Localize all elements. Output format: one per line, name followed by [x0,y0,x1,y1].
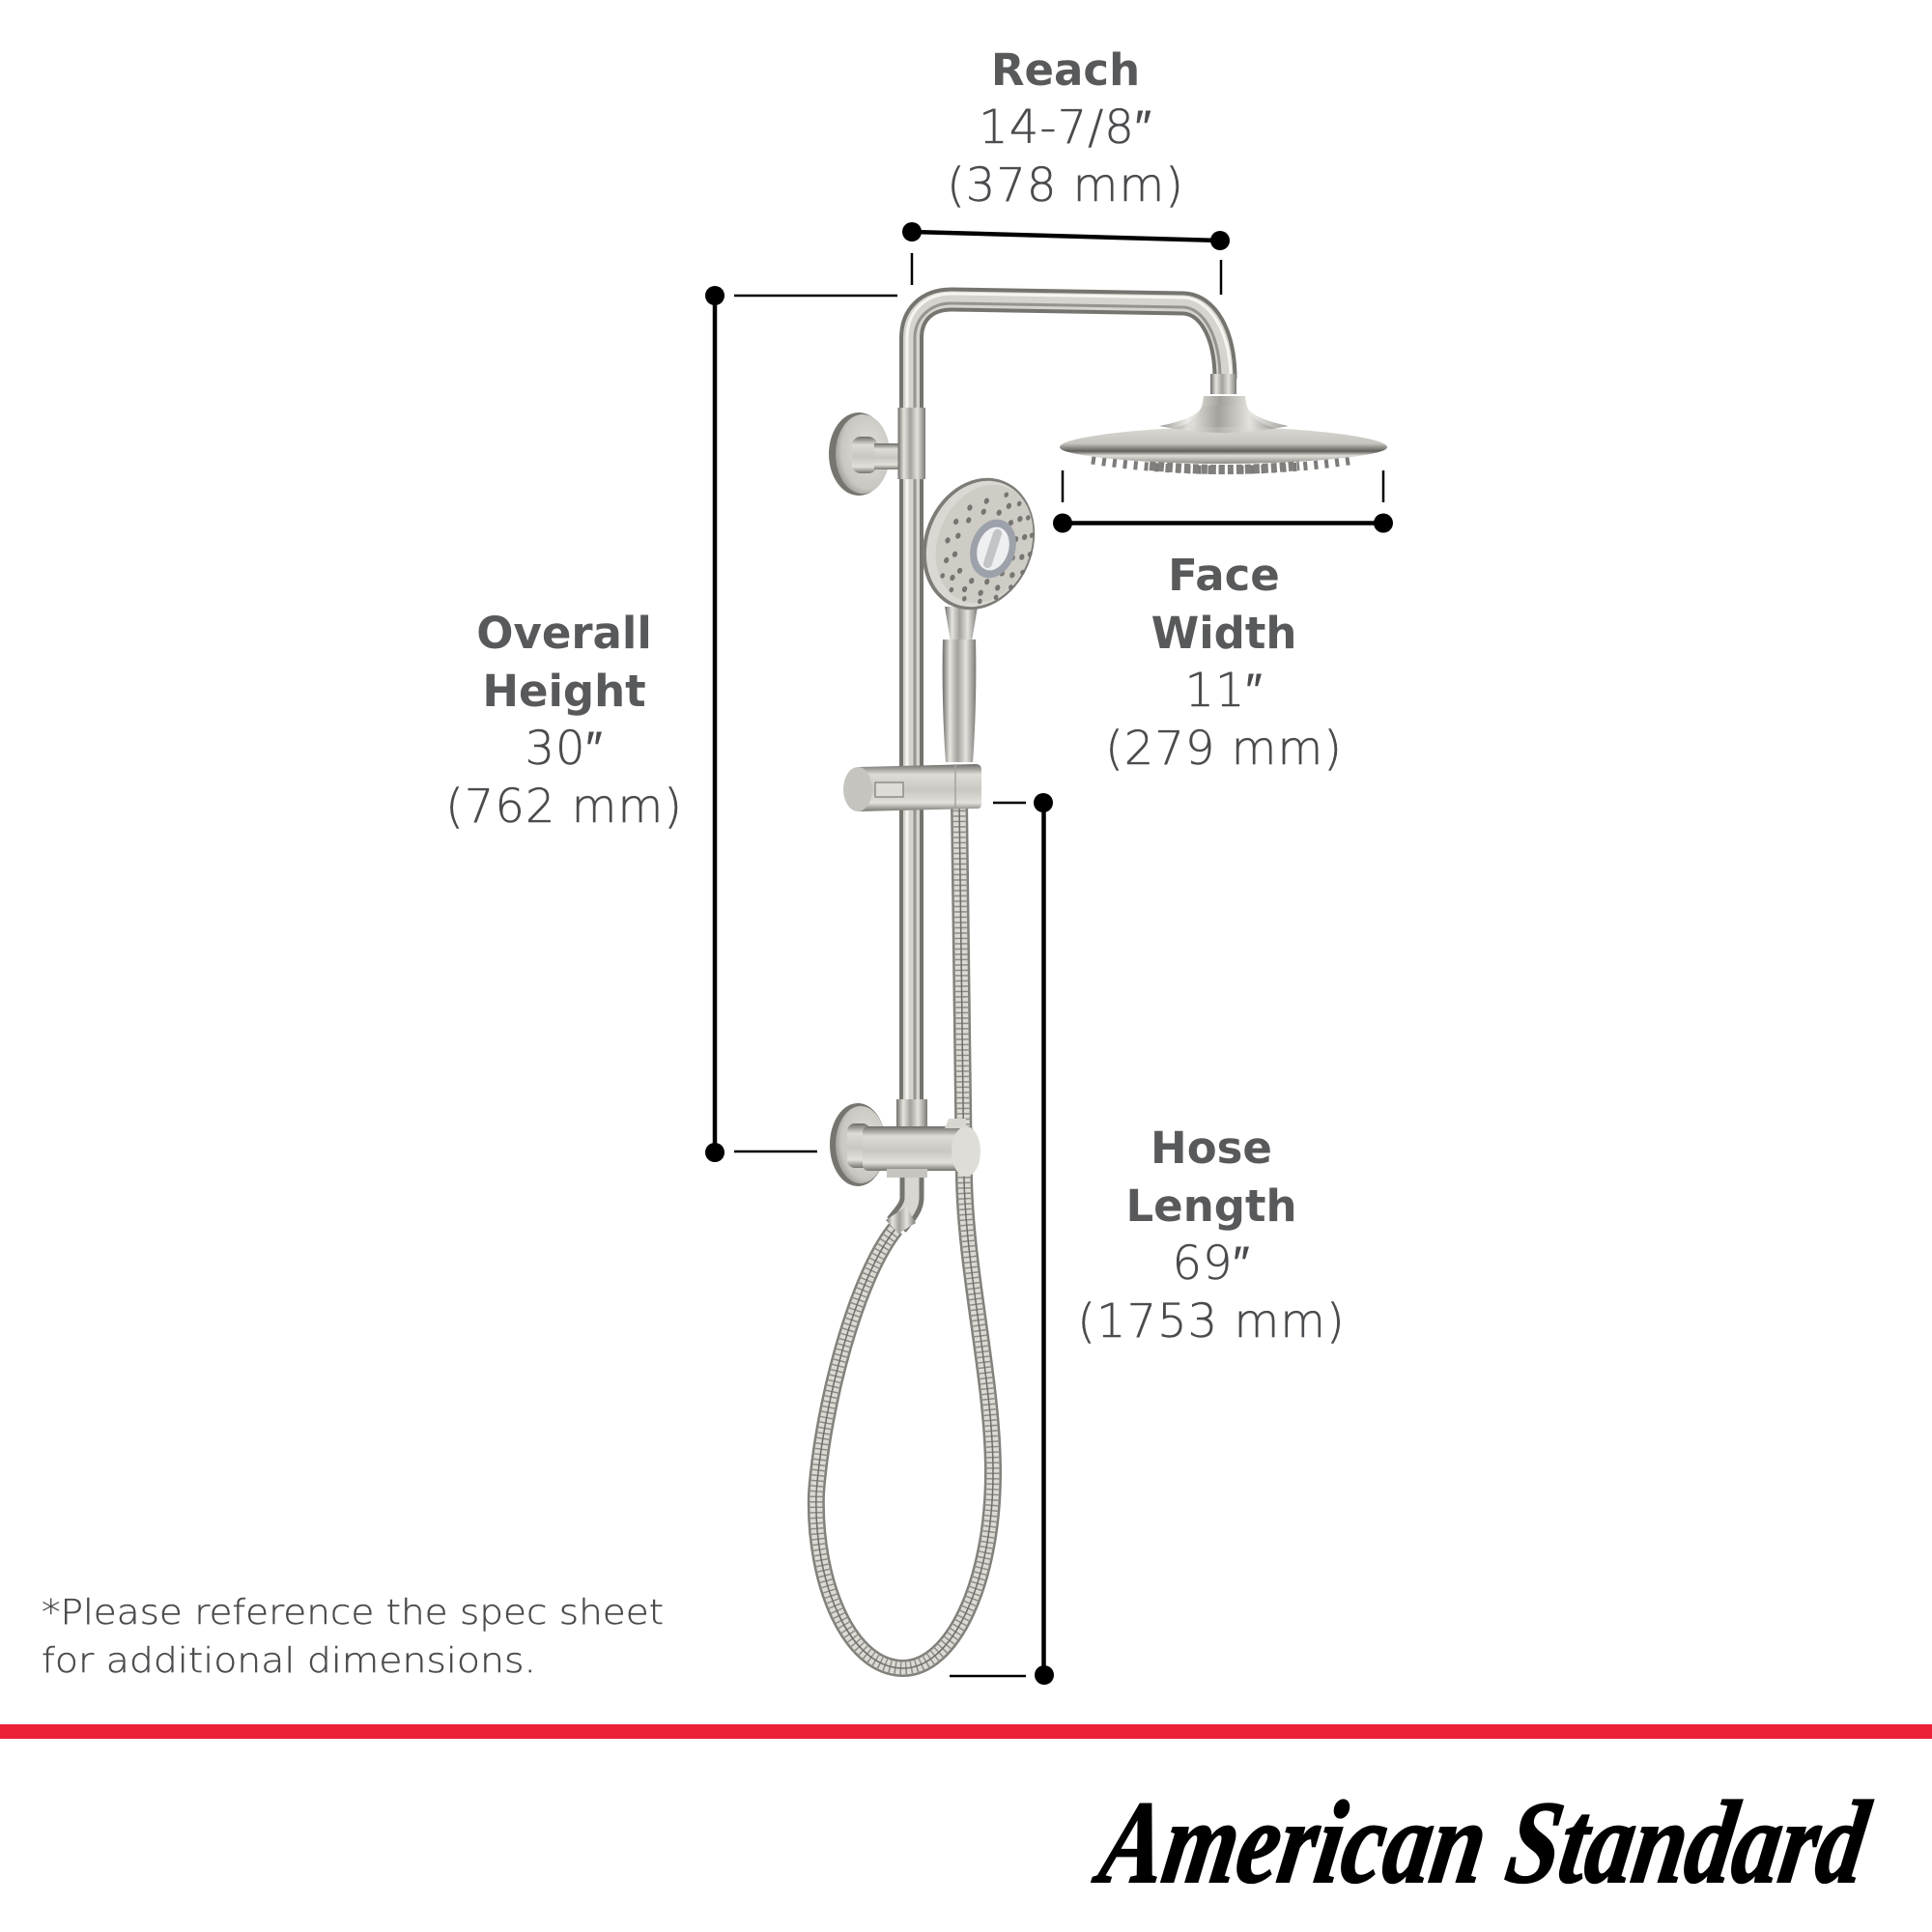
spray selector dial [963,513,1023,584]
spray nozzles [926,477,1051,618]
riser collar [898,408,925,479]
dimension: overall height [445,286,897,1162]
hose length text: Hose [1151,1122,1272,1174]
lower elbow and hose connector [886,1169,916,1234]
face width dimension line [1053,470,1393,533]
dimension: face width [1053,470,1393,776]
shower system product illustration [816,294,1387,1668]
hose length dimension line [950,793,1054,1685]
sliding holder [843,764,981,811]
overall height text [445,608,683,834]
face width text [1105,550,1343,776]
footnote: *Please reference the spec sheet [42,1593,664,1633]
rain shower head [1060,374,1387,469]
hose length text: (1753 mm) [1077,1294,1346,1349]
reach text: 14-7/8″ [979,100,1152,155]
hose length text: Length [1126,1180,1296,1232]
riser pipe and shower arm [907,294,1231,1130]
lower wall mount and bracket [830,1099,980,1186]
overall height text: (762 mm) [445,780,683,834]
reach text: Reach [991,44,1140,96]
reach dimension line [902,222,1230,295]
hose length text [1077,1122,1346,1349]
hand shower handle [943,607,978,762]
reach text: (378 mm) [947,158,1184,213]
upper wall mount [829,412,899,496]
face width text: Width [1151,608,1296,659]
hose length text: 69″ [1172,1236,1251,1291]
footnote [42,1593,664,1681]
red divider bar [0,1724,1932,1739]
face width text: (279 mm) [1105,722,1343,776]
reach text [947,44,1184,213]
face width text: Face [1168,550,1280,601]
dimension: reach [902,44,1230,295]
flexible hose [816,802,993,1668]
overall height text: Overall [476,608,652,659]
hand shower head [903,461,1054,627]
overall height dimension line [705,286,897,1162]
overall height text: 30″ [525,722,604,776]
overall height text: Height [482,666,646,717]
footnote: for additional dimensions. [42,1641,536,1681]
face width text: 11″ [1184,664,1264,718]
dimension: hose length [950,793,1346,1685]
